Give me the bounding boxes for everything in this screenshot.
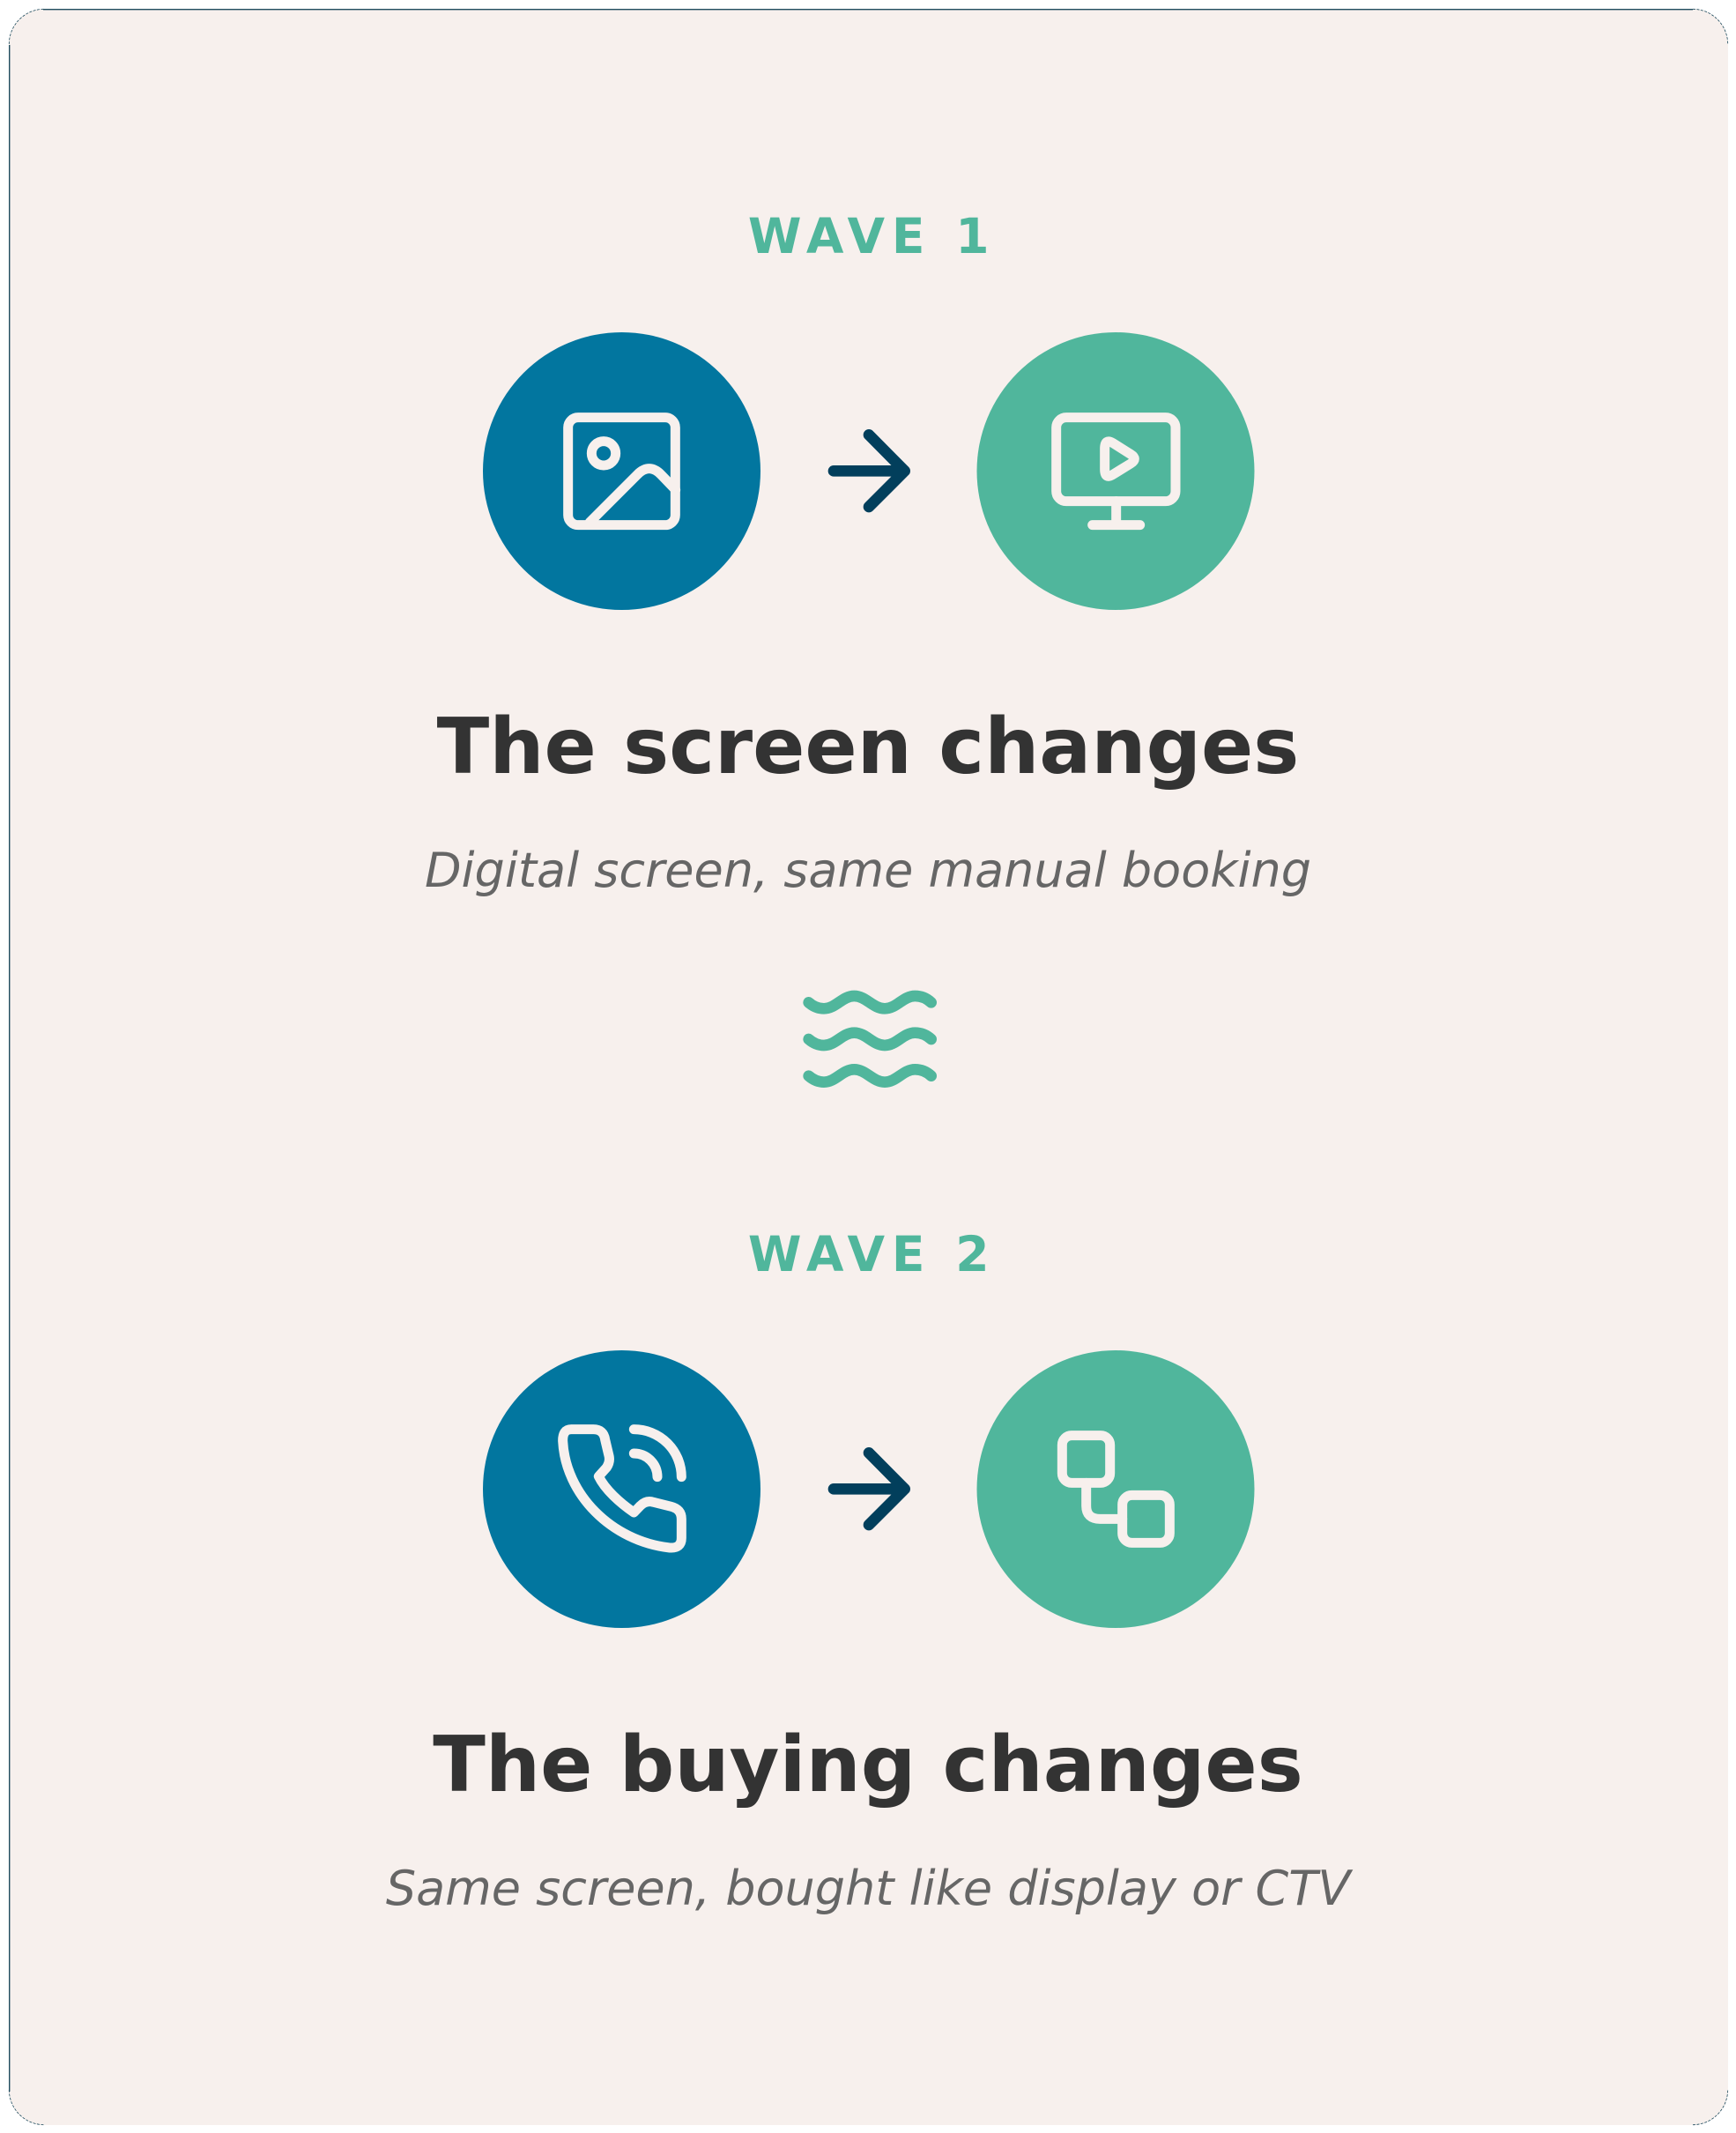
section: wave 1: [425, 208, 1311, 898]
icon: waves divider: [809, 996, 931, 1082]
heading: the buying changes: The buying changes: [433, 1720, 1303, 1810]
icon: phone call in blue circle: [483, 1350, 760, 1628]
heading: wave 1 label: WAVE 1: [748, 208, 996, 264]
text: wave 2 description: Same screen, bought like display or CTV: [386, 1861, 1354, 1916]
icon: video monitor in green circle: [976, 332, 1255, 610]
heading: wave 2 label: WAVE 2: [748, 1226, 996, 1282]
arrow: image to screen: [834, 435, 905, 507]
arrow: phone to programmatic: [834, 1453, 905, 1525]
text: wave 1 description: Digital screen, same manual booking: [425, 843, 1311, 898]
icon: connected nodes in green circle: [976, 1350, 1255, 1628]
section: wave 2: [386, 1226, 1354, 1916]
icon: image in blue circle: [483, 332, 760, 610]
heading: the screen changes: The screen changes: [437, 702, 1299, 792]
